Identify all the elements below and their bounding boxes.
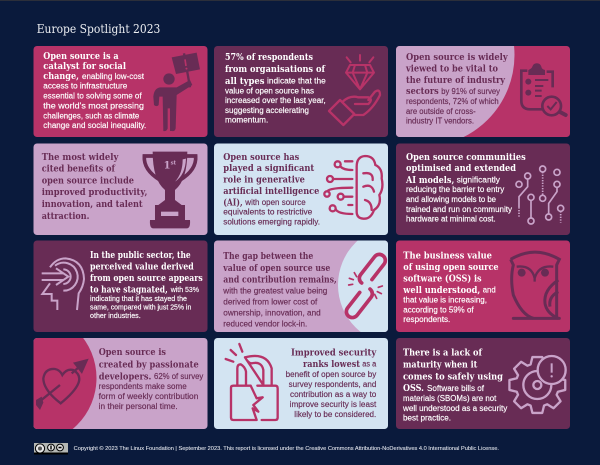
- text: security ranks lowest: ranks lowest: [303, 360, 361, 370]
- text: social change: challenges, such as climate: [43, 111, 139, 120]
- text: social change: [43, 52, 146, 130]
- text: social change: Open source is a: [43, 52, 119, 62]
- text: future of industry sectors: Open source is widely: [406, 53, 509, 63]
- icon: circuit lines: [516, 166, 564, 224]
- panel: lack of maturity: [396, 338, 570, 429]
- text: contribution gap: ownership, innovation, and: [223, 308, 321, 318]
- text: passionate developers: developers.: [99, 372, 151, 382]
- text: passionate developers: in their personal time.: [99, 402, 178, 411]
- panel: security ranks lowest: [214, 338, 388, 429]
- text: business value: and: [483, 286, 496, 294]
- footer: copyright text: Copyright © 2023 The Linux Foundation | September 2023. This report is licensed under the Creative Commons Attribution-NoDerivatives 4.0 International Public License.: [74, 445, 499, 452]
- text: communities and AI models: reducing the barrier to entry: [406, 185, 504, 194]
- text: business value: respondents.: [403, 315, 450, 324]
- text: security ranks lowest: likely to be considered.: [294, 410, 376, 419]
- text: security ranks lowest: [286, 348, 377, 419]
- text: public sector: same, compared with just 25% in: [90, 302, 191, 312]
- icon: owl: [511, 252, 559, 318]
- text: passionate developers: 62% of survey: [154, 372, 203, 381]
- text: social change: change and social inequality.: [43, 121, 146, 130]
- text: lack of maturity: OSS.: [403, 384, 424, 394]
- text: public sector: indicating that it has stayed the: [90, 294, 187, 303]
- text: lack of maturity: maturity when it: [403, 360, 478, 370]
- text: social change: essential to solving some of: [43, 92, 142, 101]
- text: generative AI: solutions emerging rapidly.: [223, 217, 320, 226]
- text: most cited benefits: innovation, and talent: [42, 200, 144, 210]
- text: public sector: perceived value derived: [90, 262, 194, 272]
- panel: social change: [34, 46, 208, 137]
- text: passionate developers: created by passionate: [99, 360, 199, 370]
- text: public sector: to have stagnated,: [90, 286, 168, 296]
- text: public sector: from open source appears: [90, 274, 203, 284]
- panel: business value: [396, 240, 570, 332]
- panel: future of industry sectors: [396, 46, 570, 137]
- icon: person holding a flag: [153, 53, 200, 131]
- text: communities and AI models: AI models,: [405, 176, 454, 186]
- text: 57% of respondents: from organisations of: [225, 65, 326, 75]
- text: generative AI: artificial intelligence: [223, 187, 320, 197]
- text: communities and AI models: trained and run on community: [406, 205, 512, 214]
- text: future of industry sectors: by 91% of survey: [441, 87, 500, 96]
- text: most cited benefits: [42, 153, 147, 222]
- text: generative AI: role in generative: [223, 176, 305, 186]
- text: contribution gap: [222, 252, 337, 328]
- panel: 57% of respondents: [214, 46, 388, 137]
- text: passionate developers: [99, 348, 203, 411]
- text: communities and AI models: significantly: [457, 176, 500, 184]
- text: passionate developers: form of weekly contribution: [99, 392, 198, 401]
- text: communities and AI models: optimised and extended: [406, 164, 516, 174]
- text: most cited benefits: attraction.: [42, 212, 89, 222]
- text: passionate developers: Open source is: [99, 348, 166, 358]
- text: contribution gap: derived from lower cost of: [223, 298, 318, 306]
- text: generative AI: equivalents to restrictive: [223, 208, 312, 217]
- text: lack of maturity: materials (SBOMs) are not: [403, 394, 497, 403]
- text: generative AI: with open source: [244, 198, 306, 207]
- text: public sector: [90, 251, 203, 320]
- text: future of industry sectors: viewed to be vital to: [405, 64, 498, 74]
- text: public sector: with 53%: [170, 285, 200, 294]
- text: contribution gap: The gap between the: [223, 252, 314, 262]
- title: Europe Spotlight 2023: [37, 22, 160, 36]
- icon: clipboard and magnifier: [521, 63, 566, 115]
- text: communities and AI models: [405, 153, 526, 224]
- text: social change: change,: [43, 72, 79, 82]
- text: contribution gap: reduced vendor lock-in.: [223, 320, 307, 328]
- icon: diamond over a hand: [329, 55, 380, 125]
- text: most cited benefits: improved productivity,: [42, 188, 147, 198]
- icon: broken padlock: [226, 344, 278, 420]
- text: lack of maturity: Software bills of: [427, 384, 485, 393]
- panel: generative AI: [214, 144, 388, 235]
- text: 57% of respondents: [225, 53, 326, 125]
- text: communities and AI models: hardware at minimal cost.: [406, 215, 496, 224]
- text: future of industry sectors: the future of industry: [406, 76, 506, 86]
- panel: most cited benefits: [34, 144, 208, 235]
- text: business value: The business value: [403, 252, 492, 262]
- icon: trophy: st: [171, 161, 177, 167]
- text: security ranks lowest: improve security is least: [290, 400, 377, 409]
- text: communities and AI models: and allowing models to be: [406, 195, 496, 204]
- text: security ranks lowest: survey respondents, and: [289, 380, 376, 389]
- text: generative AI: (AI),: [223, 198, 243, 208]
- text: social change: catalyst for social: [43, 62, 127, 72]
- text: contribution gap: and contribution remains,: [223, 276, 337, 286]
- text: 57% of respondents: suggesting accelerating: [225, 106, 309, 115]
- panel: communities and AI models: [396, 144, 570, 235]
- text: generative AI: Open source has: [223, 153, 299, 163]
- text: passionate developers: respondents make some: [99, 382, 187, 391]
- footer: Creative Commons badge: [34, 443, 68, 454]
- text: business value: [402, 252, 499, 324]
- text: lack of maturity: well understood as a security: [402, 404, 507, 413]
- icon: gear with warning: [509, 356, 566, 413]
- text: security ranks lowest: contribution as a way to: [290, 390, 377, 399]
- text: 57% of respondents: 57% of respondents: [225, 53, 313, 63]
- icon: circuit brain: [324, 156, 382, 219]
- icon: heart with arrow: [36, 360, 87, 410]
- text: future of industry sectors: are outside of cross-: [406, 107, 476, 116]
- icon: trophy: [144, 152, 196, 228]
- text: future of industry sectors: industry IT vendors.: [406, 117, 474, 126]
- text: security ranks lowest: Improved security: [291, 348, 377, 358]
- panel: passionate developers: [34, 338, 208, 429]
- text: business value: that value is increasing,: [403, 295, 487, 304]
- text: lack of maturity: comes to safely using: [403, 372, 503, 382]
- panel: public sector: [34, 240, 208, 332]
- text: 57% of respondents: indicate that the: [267, 76, 326, 86]
- text: business value: of using open source: [403, 263, 499, 273]
- icon: broken chain: [344, 252, 388, 320]
- icon: head with target: [42, 258, 84, 310]
- text: generative AI: [223, 153, 320, 226]
- text: future of industry sectors: respondents, 72% of which: [406, 97, 499, 106]
- text: 57% of respondents: momentum.: [225, 116, 268, 125]
- text: future of industry sectors: sectors: [406, 87, 439, 97]
- text: most cited benefits: open source include: [42, 176, 134, 186]
- text: security ranks lowest: as a: [362, 360, 377, 368]
- text: security ranks lowest: benefit of open source by: [286, 370, 376, 379]
- text: business value: well understood,: [402, 286, 480, 296]
- text: public sector: In the public sector, the: [90, 251, 191, 261]
- text: 57% of respondents: increased over the last year,: [225, 96, 326, 105]
- text: business value: software (OSS) is: [403, 274, 482, 284]
- text: contribution gap: value of open source use: [222, 264, 331, 274]
- text: most cited benefits: cited benefits of: [42, 164, 116, 174]
- text: contribution gap: with the greatest value being: [222, 286, 327, 296]
- text: lack of maturity: [402, 348, 507, 422]
- text: social change: access to infrastructure: [43, 82, 127, 91]
- icon: trophy: 1: [164, 160, 171, 171]
- text: business value: according to 59% of: [403, 305, 474, 314]
- text: 57% of respondents: all types: [225, 77, 265, 87]
- text: generative AI: played a significant: [223, 164, 315, 174]
- text: social change: the world's most pressing: [43, 102, 144, 110]
- panel: contribution gap: [214, 240, 388, 332]
- text: most cited benefits: The most widely: [42, 153, 119, 163]
- text: public sector: other industries.: [90, 311, 141, 320]
- text: social change: enabling low-cost: [82, 72, 145, 81]
- text: lack of maturity: There is a lack of: [403, 348, 483, 358]
- text: 57% of respondents: value of open source has: [225, 86, 314, 95]
- text: future of industry sectors: [405, 53, 509, 126]
- text: communities and AI models: Open source communities: [406, 153, 526, 163]
- text: lack of maturity: best practice.: [403, 414, 451, 422]
